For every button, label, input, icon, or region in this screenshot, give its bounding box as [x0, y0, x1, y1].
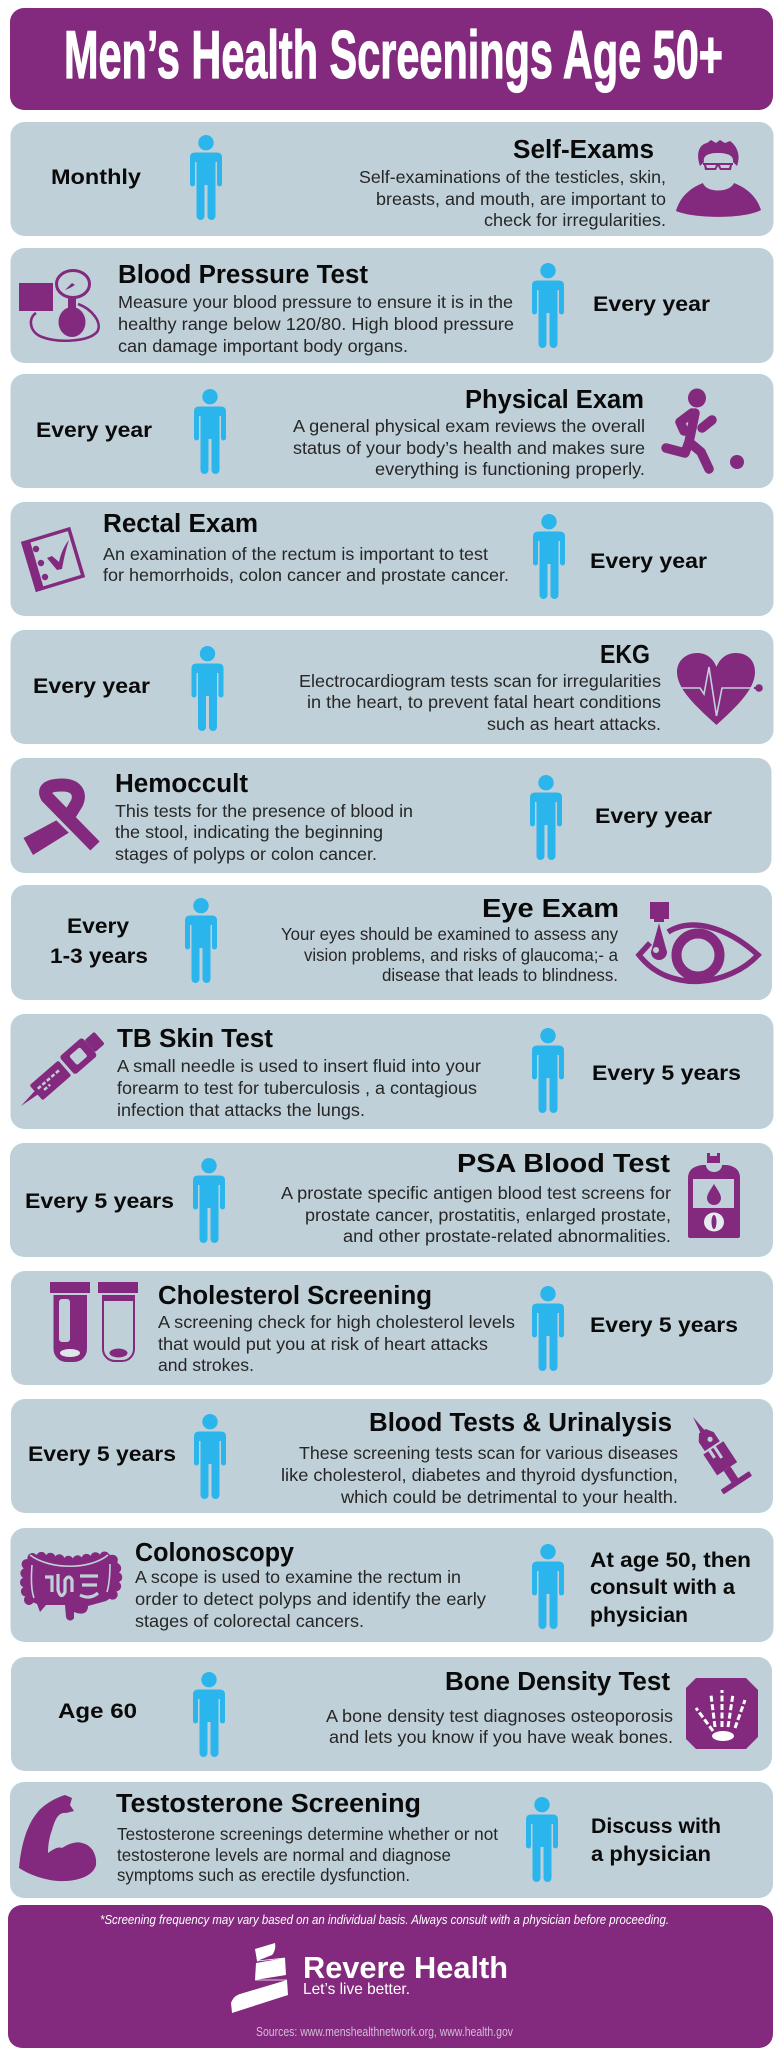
panel: self-exams [10, 122, 774, 236]
icon: flexed arm [19, 1795, 96, 1881]
icon: syringe [679, 1408, 752, 1494]
icon: person [532, 263, 564, 348]
description: such as heart attacks. [487, 714, 661, 734]
panel: testosterone screening [10, 1782, 773, 1898]
icon: checklist [22, 529, 83, 592]
panel: blood pressure test [10, 248, 774, 363]
description: A bone density test diagnoses osteoporosis [326, 1706, 673, 1726]
heading: Eye Exam [482, 895, 619, 923]
frequency: Every year [33, 674, 151, 698]
description: infection that attacks the lungs. [117, 1100, 365, 1120]
panel: TB skin test [10, 1014, 774, 1129]
description: disease that leads to blindness. [382, 965, 618, 985]
frequency [591, 1814, 721, 1866]
description: Measure your blood pressure to ensure it is in the [118, 292, 513, 312]
icon: blood glucose meter [688, 1153, 740, 1238]
heading: Hemoccult [115, 770, 249, 798]
frequency: Every 5 years [25, 1189, 174, 1213]
logo: Revere Health [231, 1943, 508, 2013]
description [115, 801, 413, 864]
icon: hand x-ray [686, 1678, 758, 1749]
icon: person [185, 898, 217, 983]
frequency: 1-3 years [50, 944, 148, 968]
description: can damage important body organs. [118, 336, 408, 356]
description [281, 1443, 678, 1507]
description [281, 924, 618, 985]
description [281, 1183, 671, 1246]
description: prostate cancer, prostatitis, enlarged prostate, [305, 1205, 671, 1225]
description: A general physical exam reviews the overall [293, 416, 645, 436]
description: and strokes. [158, 1355, 254, 1375]
description [158, 1312, 515, 1375]
panel: colonoscopy [10, 1528, 774, 1642]
heading: Blood Tests & Urinalysis [369, 1409, 672, 1437]
icon: test tubes [50, 1282, 138, 1362]
sources: Sources: www.menshealthnetwork.org, www.health.gov [256, 2025, 514, 2039]
description: the stool, indicating the beginning [115, 822, 383, 842]
icon: person [190, 135, 222, 220]
description: that would put you at risk of heart attacks [158, 1334, 488, 1354]
panel: bone density test [11, 1657, 772, 1771]
icon: runner with ball [666, 388, 744, 469]
icon: person [192, 646, 224, 731]
logo tagline: Let’s live better. [303, 1981, 410, 1998]
heading: EKG [600, 641, 650, 669]
frequency: Every year [36, 418, 153, 442]
panel: blood tests and urinalysis [11, 1399, 773, 1513]
icon: blood pressure cuff [19, 270, 99, 341]
description: and other prostate-related abnormalities. [343, 1226, 671, 1246]
icon: man with glasses [676, 140, 761, 217]
heading: Cholesterol Screening [158, 1282, 432, 1310]
description [117, 1824, 498, 1885]
frequency: a physician [591, 1842, 711, 1866]
description: everything is functioning properly. [375, 459, 645, 479]
panel: rectal exam [10, 502, 774, 616]
description: healthy range below 120/80. High blood pressure [118, 314, 514, 334]
icon: person [532, 1028, 564, 1113]
panel: physical exam [10, 374, 774, 488]
description: Your eyes should be examined to assess any [281, 924, 618, 944]
frequency: consult with a [590, 1575, 736, 1599]
heading: Bone Density Test [445, 1668, 671, 1696]
panel: EKG [10, 630, 774, 744]
icon: ribbon [24, 785, 95, 855]
icon: injector pen [13, 1029, 107, 1115]
icon: person [193, 1158, 225, 1243]
description [293, 416, 645, 479]
description: testosterone levels are normal and diagnose [117, 1845, 451, 1865]
heading: TB Skin Test [117, 1025, 274, 1053]
description [103, 544, 509, 585]
description: forearm to test for tuberculosis , a contagious [117, 1078, 477, 1098]
description: in the heart, to prevent fatal heart conditions [307, 692, 661, 712]
heading: Physical Exam [465, 386, 644, 414]
frequency: Age 60 [58, 1699, 137, 1723]
description [118, 292, 514, 356]
title banner [10, 8, 773, 110]
frequency: Every 5 years [28, 1442, 176, 1466]
frequency [590, 1548, 751, 1627]
description: stages of colorectal cancers. [135, 1611, 364, 1631]
icon: person [526, 1797, 558, 1882]
icon: person [194, 389, 226, 474]
icon: heart with ECG [677, 653, 763, 725]
frequency [50, 914, 148, 968]
icon: eye with dropper [639, 902, 758, 981]
footer panel [8, 1905, 773, 2048]
panel: eye exam [11, 885, 772, 1000]
panel: cholesterol screening [11, 1271, 773, 1385]
frequency: Monthly [51, 165, 141, 189]
description: like cholesterol, diabetes and thyroid dysfunction, [281, 1465, 678, 1485]
icon: person [532, 1286, 564, 1371]
logo mark [231, 1943, 288, 2013]
description [117, 1056, 481, 1120]
description: status of your body’s health and makes sure [293, 438, 645, 458]
icon: person [533, 514, 565, 599]
logo name: Revere Health [303, 1950, 508, 1985]
description: This tests for the presence of blood in [115, 801, 413, 821]
icon: person [532, 1544, 564, 1629]
disclaimer note: *Screening frequency may vary based on an individual basis. Always consult with a physician before proceeding. [100, 1913, 669, 1927]
heading: Rectal Exam [103, 510, 258, 538]
description: vision problems, and risks of glaucoma;- a [304, 945, 618, 965]
description: symptoms such as erectile dysfunction. [117, 1865, 410, 1885]
description: Electrocardiogram tests scan for irregularities [299, 671, 661, 691]
description: A prostate specific antigen blood test screens for [281, 1183, 671, 1203]
heading: Testosterone Screening [116, 1790, 421, 1818]
description: An examination of the rectum is important to test [103, 544, 488, 564]
description: order to detect polyps and identify the early [135, 1589, 486, 1609]
description: and lets you know if you have weak bones. [329, 1727, 673, 1747]
description: These screening tests scan for various diseases [299, 1443, 678, 1463]
heading: PSA Blood Test [457, 1150, 671, 1178]
frequency: At age 50, then [590, 1548, 751, 1572]
description [359, 167, 666, 230]
description: which could be detrimental to your health. [340, 1487, 678, 1507]
description: check for irregularities. [484, 210, 666, 230]
panel: PSA blood test [10, 1143, 773, 1257]
heading: Blood Pressure Test [118, 261, 369, 289]
frequency: Every [67, 914, 129, 938]
description: A small needle is used to insert fluid into your [117, 1056, 481, 1076]
description [326, 1706, 673, 1747]
description [299, 671, 661, 734]
frequency: Every year [593, 292, 711, 316]
heading: Self-Exams [513, 136, 654, 164]
icon: colon [25, 1554, 118, 1621]
description: A screening check for high cholesterol levels [158, 1312, 515, 1332]
icon: person [530, 775, 562, 860]
description: stages of polyps or colon cancer. [115, 844, 377, 864]
frequency: Every 5 years [590, 1313, 738, 1337]
description: Self-examinations of the testicles, skin, [359, 167, 666, 187]
icon: person [193, 1672, 225, 1757]
description: A scope is used to examine the rectum in [135, 1567, 461, 1587]
heading: Colonoscopy [135, 1539, 295, 1567]
frequency: Every year [590, 549, 708, 573]
icon: person [194, 1414, 226, 1499]
frequency: Every 5 years [592, 1061, 741, 1085]
panel: hemoccult [10, 758, 772, 873]
description [135, 1567, 486, 1631]
frequency: Discuss with [591, 1814, 721, 1838]
description: Testosterone screenings determine whether or not [117, 1824, 498, 1844]
frequency: physician [590, 1603, 688, 1627]
description: for hemorrhoids, colon cancer and prostate cancer. [103, 565, 509, 585]
description: breasts, and mouth, are important to [376, 189, 666, 209]
frequency: Every year [595, 804, 713, 828]
